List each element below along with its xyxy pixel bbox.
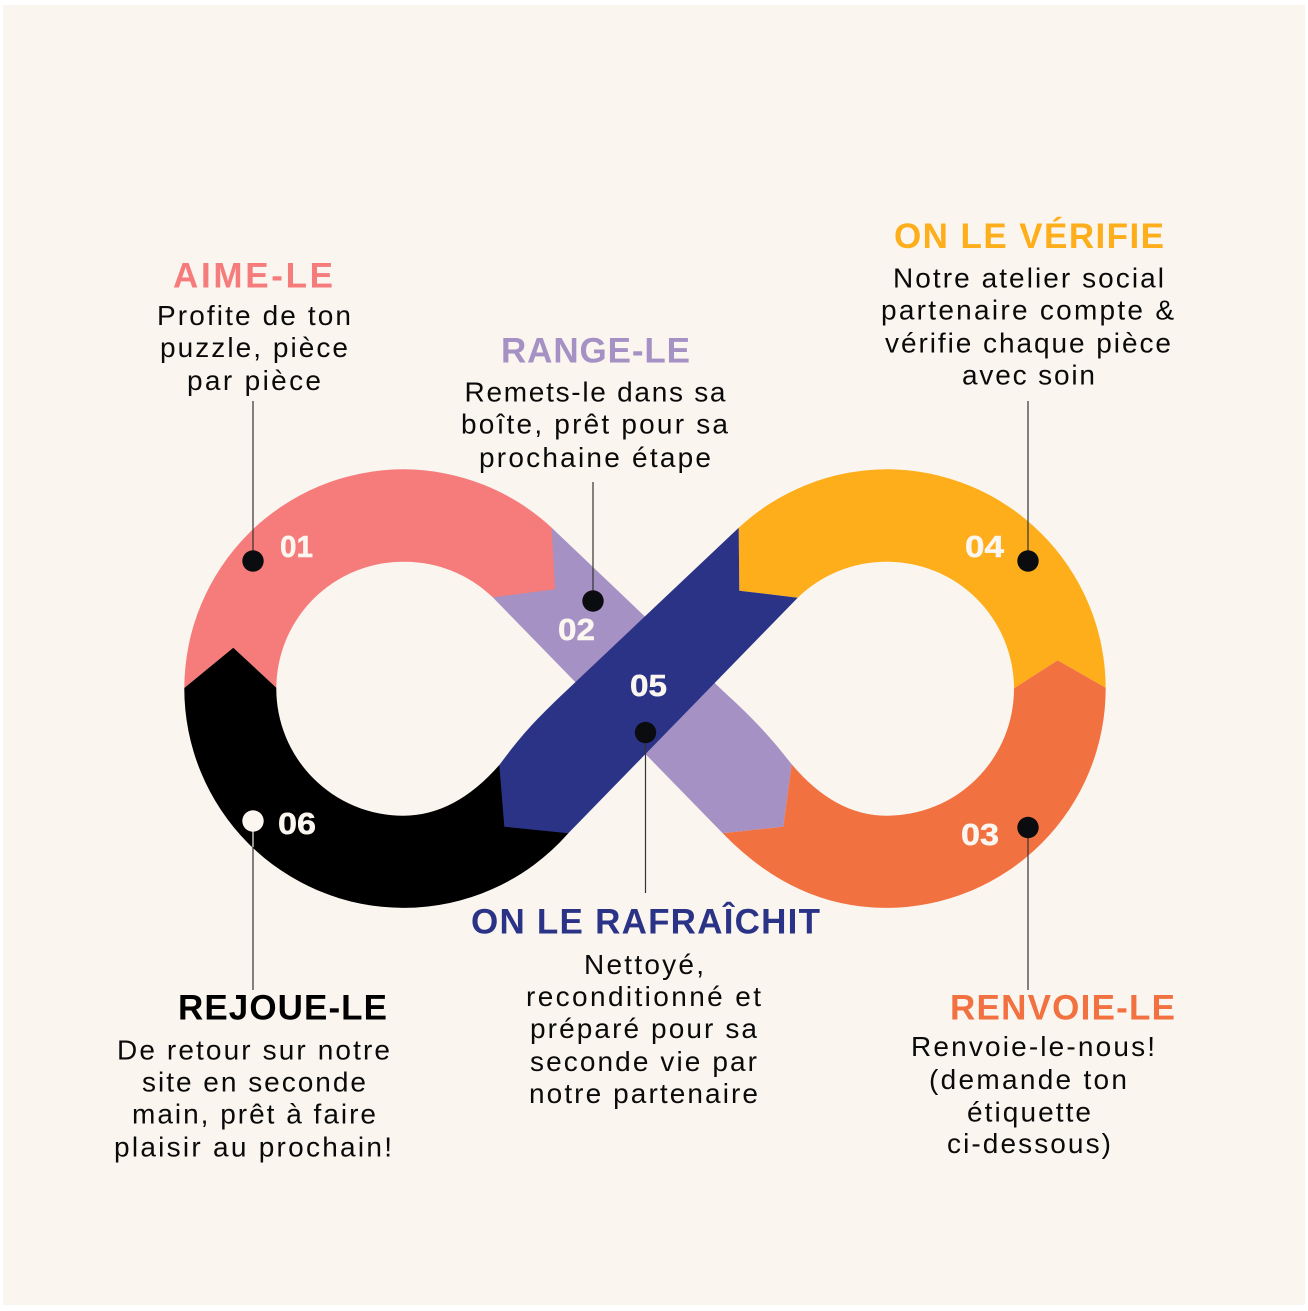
description: range-le: boîte, prêt pour sa [461,408,728,440]
text block: on le vérifie [881,216,1174,390]
heading: on le rafraîchit: ON LE RAFRAÎCHIT [471,902,820,942]
leader line: 01 [252,401,254,561]
description: aime-le: Profite de ton [157,300,351,331]
description: aime-le: puzzle, pièce [160,332,348,363]
marker dot: 02 [582,590,604,612]
description: renvoie-le: ci-dessous) [947,1128,1111,1159]
description: range-le [461,376,728,473]
number 06: 06 [278,806,316,841]
description: rejoue-le: main, prêt à faire [132,1098,376,1130]
segment 05: navy [499,528,798,833]
heading: on le vérifie: ON LE VÉRIFIE [894,216,1164,256]
description: range-le: Remets-le dans sa [464,376,726,408]
description: on le rafraîchit: préparé pour sa [530,1013,757,1044]
description: on le vérifie: vérifie chaque pièce [885,328,1171,358]
leader line: 02 [592,482,594,601]
description: on le vérifie: Notre atelier social [893,262,1164,294]
heading: aime-le: AIME-LE [173,256,333,296]
leader line: 03 [1027,827,1029,990]
text block: on le rafraîchit [471,902,820,1109]
description: on le vérifie: partenaire compte & [881,294,1174,326]
heading: range-le: RANGE-LE [501,332,690,370]
segment 03: orange [723,660,1106,908]
description: renvoie-le [911,1031,1155,1159]
text block: rejoue-le [114,988,392,1162]
number 03: 03 [961,817,999,852]
segment 02: purple [493,528,792,833]
description: on le rafraîchit: notre partenaire [529,1078,758,1109]
marker dot: 03 [1017,817,1039,838]
segment 04: yellow [739,469,1106,688]
description: renvoie-le: étiquette [967,1096,1091,1128]
description: range-le: prochaine étape [479,442,711,473]
description: on le vérifie: avec soin [962,360,1095,390]
heading: rejoue-le: REJOUE-LE [178,988,387,1028]
leader line: 05 [644,732,646,893]
leader line: 06 [252,821,254,990]
marker dot: 01 [242,550,264,572]
description: rejoue-le: plaisir au prochain! [114,1132,392,1162]
segment 01: pink [184,469,555,688]
description: rejoue-le: site en seconde [142,1066,366,1098]
description: on le vérifie [881,262,1174,390]
description: on le rafraîchit [526,949,761,1109]
chart: infinity loop [184,469,1106,908]
marker dot: 05 [635,722,656,743]
heading: renvoie-le: RENVOIE-LE [950,988,1175,1028]
number 01: 01 [280,529,313,564]
number 04: 04 [965,529,1005,564]
text block: range-le [461,332,728,473]
description: aime-le: par pièce [187,365,321,396]
description: renvoie-le: (demande ton [929,1064,1127,1095]
description: aime-le [157,300,351,396]
description: rejoue-le: De retour sur notre [117,1034,390,1066]
number 05: 05 [630,668,667,703]
description: on le rafraîchit: Nettoyé, [584,949,704,980]
leader line: 04 [1027,401,1029,561]
description: renvoie-le: Renvoie-le-nous! [911,1031,1155,1062]
marker dot: 06 [242,810,264,832]
marker dot: 04 [1017,550,1039,572]
description: on le rafraîchit: reconditionné et [526,981,761,1012]
description: rejoue-le [114,1034,392,1162]
description: on le rafraîchit: seconde vie par [530,1046,757,1077]
text block: renvoie-le [911,988,1175,1159]
text block: aime-le [157,256,351,396]
number 02: 02 [558,612,595,647]
segment 06: black [184,648,568,908]
